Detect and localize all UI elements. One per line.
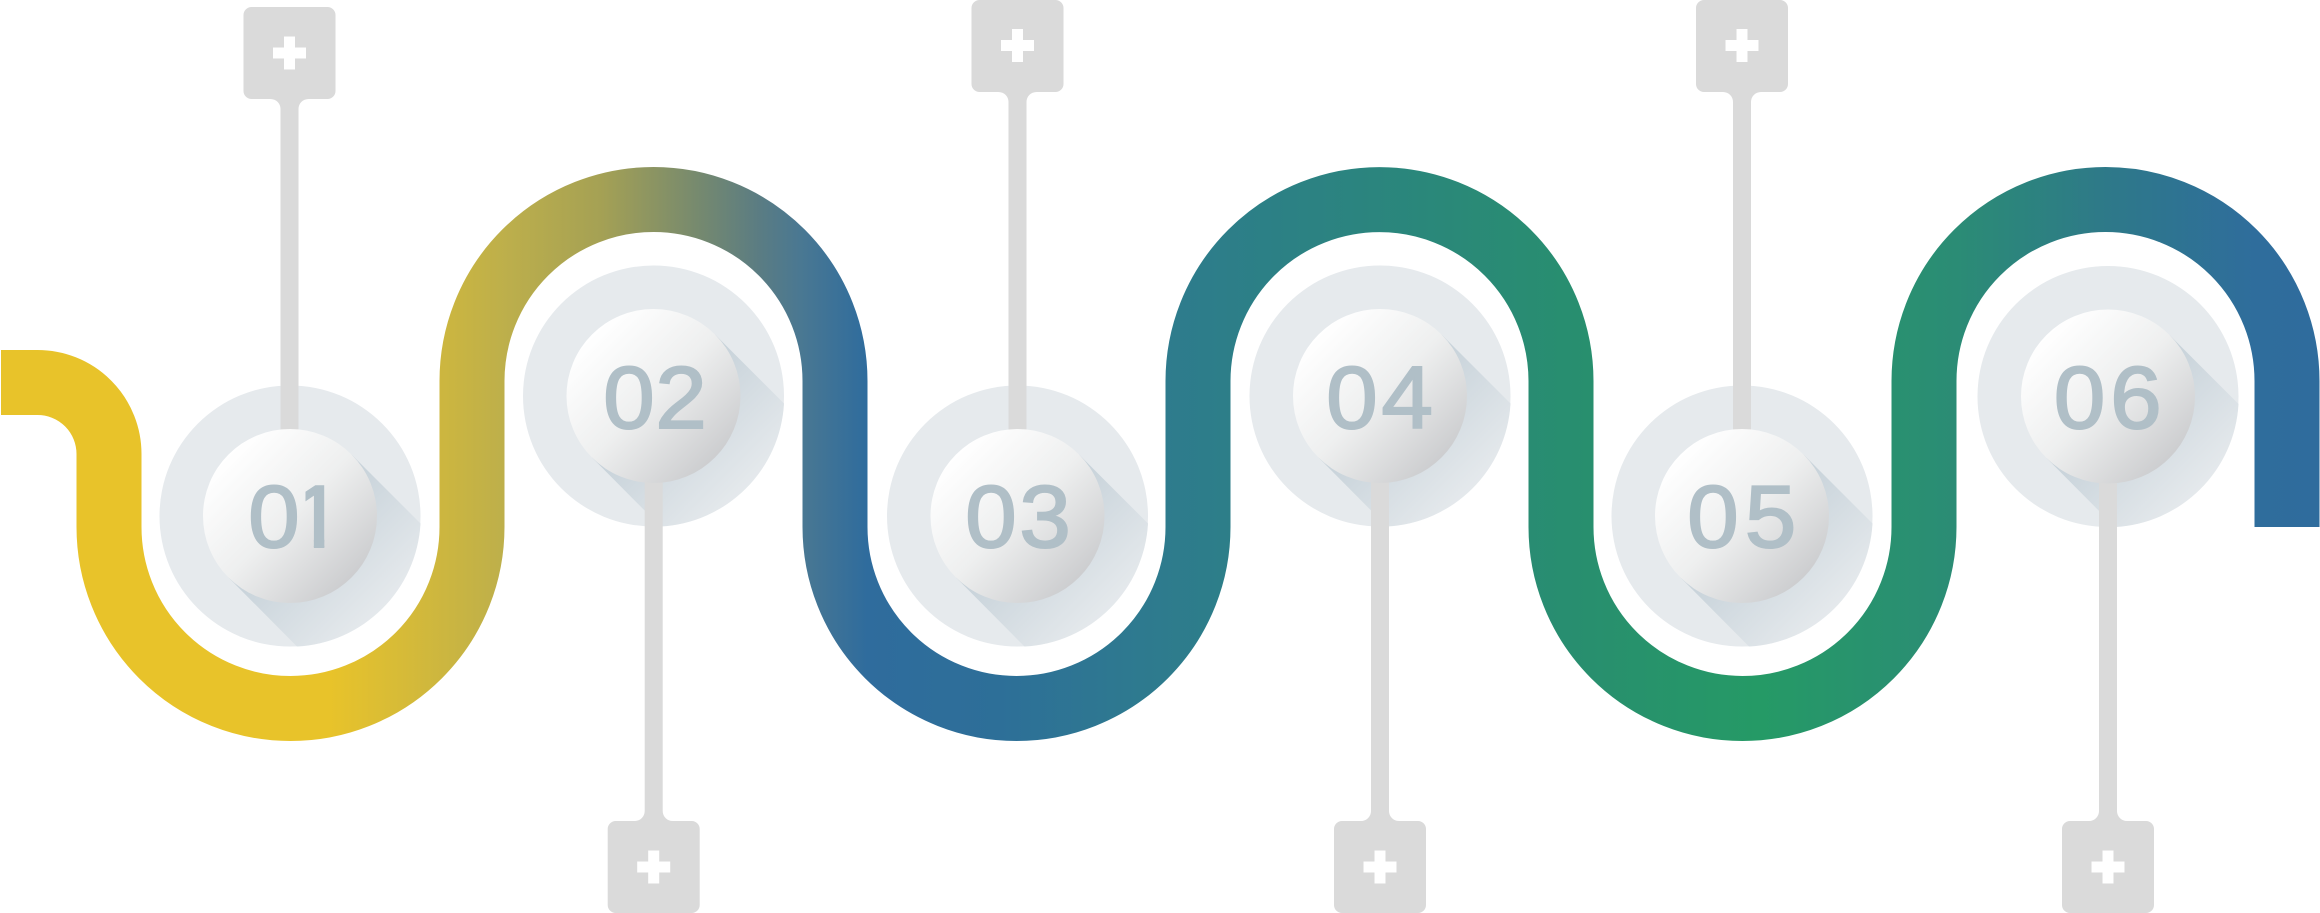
- step 02 pin with plus button: [608, 473, 700, 913]
- step 06: [1978, 266, 2238, 913]
- step 05 number: [1687, 468, 1796, 567]
- step 03 backing disc: [887, 386, 1148, 646]
- step 05: [1612, 0, 1872, 646]
- step 02 number: 0: [603, 349, 655, 448]
- step 02 long shadow: [592, 334, 784, 526]
- step 04 number: [1326, 349, 1433, 448]
- step 02: [523, 266, 784, 913]
- step 05 number: 5: [1745, 468, 1796, 567]
- step 02 number: 2: [655, 349, 707, 448]
- step 03 pin with plus button: [972, 0, 1064, 440]
- step 05 backing disc: [1612, 386, 1872, 646]
- step 04 ball: [1293, 309, 1467, 483]
- step 06 pin with plus button: [2062, 473, 2154, 913]
- step 03: [887, 0, 1148, 646]
- step 04 number: 4: [1382, 349, 1433, 448]
- step 05 pin with plus button: [1696, 0, 1788, 440]
- step 05 number: 0: [1687, 468, 1739, 567]
- winding ribbon path: [1, 200, 2287, 708]
- step 05 ball: [1655, 429, 1829, 603]
- step 06 long shadow: [2046, 335, 2238, 527]
- step 01 number: 0: [248, 468, 300, 567]
- step 04 long shadow: [1318, 334, 1510, 526]
- step 03 number: 0: [965, 468, 1017, 567]
- step 05 long shadow: [1680, 454, 1872, 646]
- step 01 long shadow: [228, 454, 420, 646]
- step 02 number: [603, 349, 707, 448]
- step 01 ball: [203, 429, 377, 603]
- step 01 number: [250, 484, 324, 549]
- step 02 backing disc: [523, 266, 784, 526]
- step 06 backing disc: [1978, 266, 2238, 527]
- step 03 ball: [930, 429, 1104, 603]
- step 01: [160, 7, 420, 646]
- step 03 number: 3: [1019, 468, 1071, 567]
- step 01 backing disc: [160, 386, 420, 646]
- step 06 number: 6: [2110, 349, 2162, 448]
- step 01 pin with plus button: [244, 7, 336, 447]
- step 06 number: [2054, 349, 2162, 448]
- step 01 number: 1: [292, 468, 343, 567]
- step 04 backing disc: [1250, 266, 1510, 526]
- step 03 number: [965, 468, 1071, 567]
- step 04 number: 0: [1326, 349, 1378, 448]
- step 06 ball: [2021, 310, 2195, 484]
- step 04 pin with plus button: [1334, 473, 1426, 913]
- step 06 number: 0: [2054, 349, 2105, 448]
- step 02 ball: [566, 309, 740, 483]
- step 03 long shadow: [956, 454, 1148, 646]
- step 04: [1250, 266, 1510, 913]
